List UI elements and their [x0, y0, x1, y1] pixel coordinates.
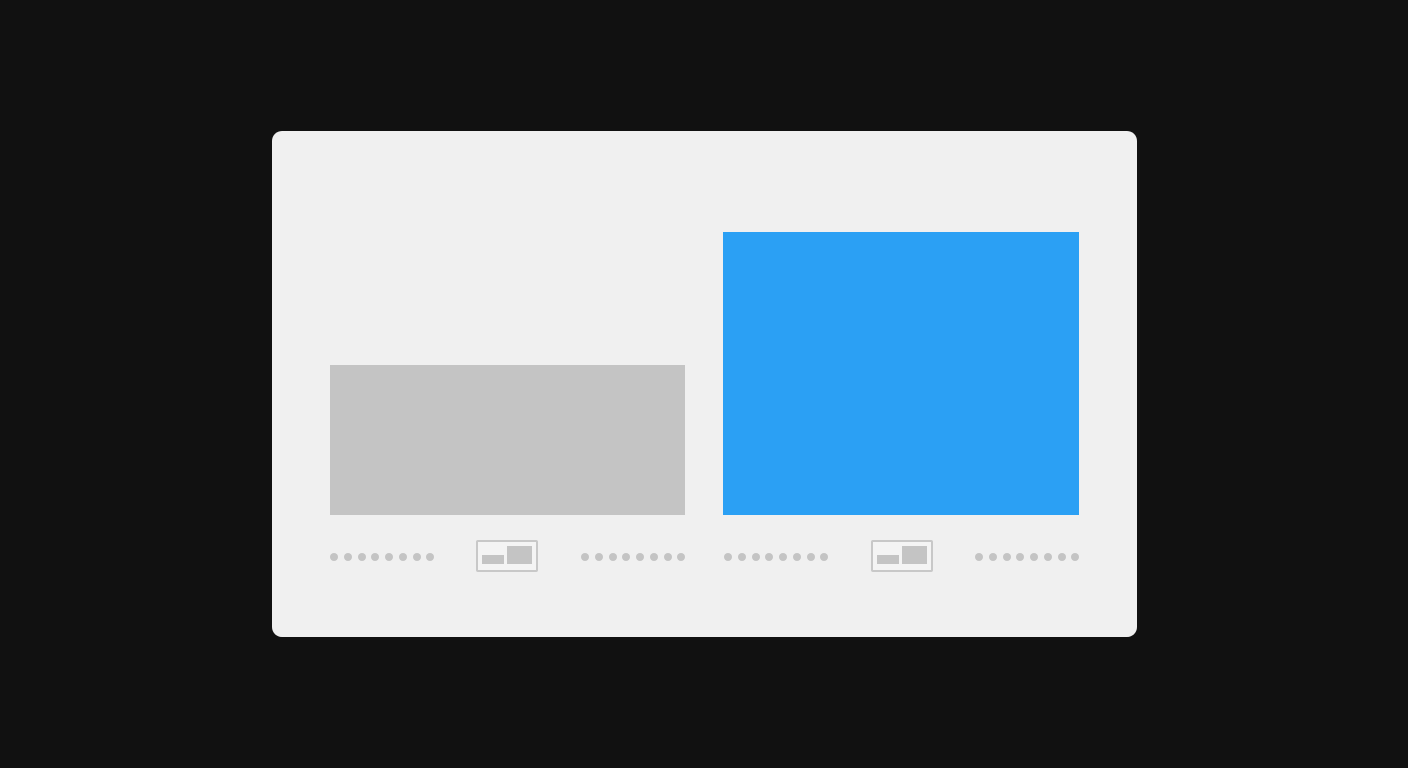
bar: blue comparison bar [723, 232, 1079, 515]
legend: right dots 1 [724, 553, 828, 561]
legend: left dots 2 [581, 553, 685, 561]
panel: card [272, 131, 1137, 637]
icon: left chart icon [476, 540, 538, 572]
icon: right chart icon [871, 540, 933, 572]
legend: right dots 2 [975, 553, 1079, 561]
bar: grey comparison bar [330, 365, 685, 515]
legend: left dots 1 [330, 553, 434, 561]
